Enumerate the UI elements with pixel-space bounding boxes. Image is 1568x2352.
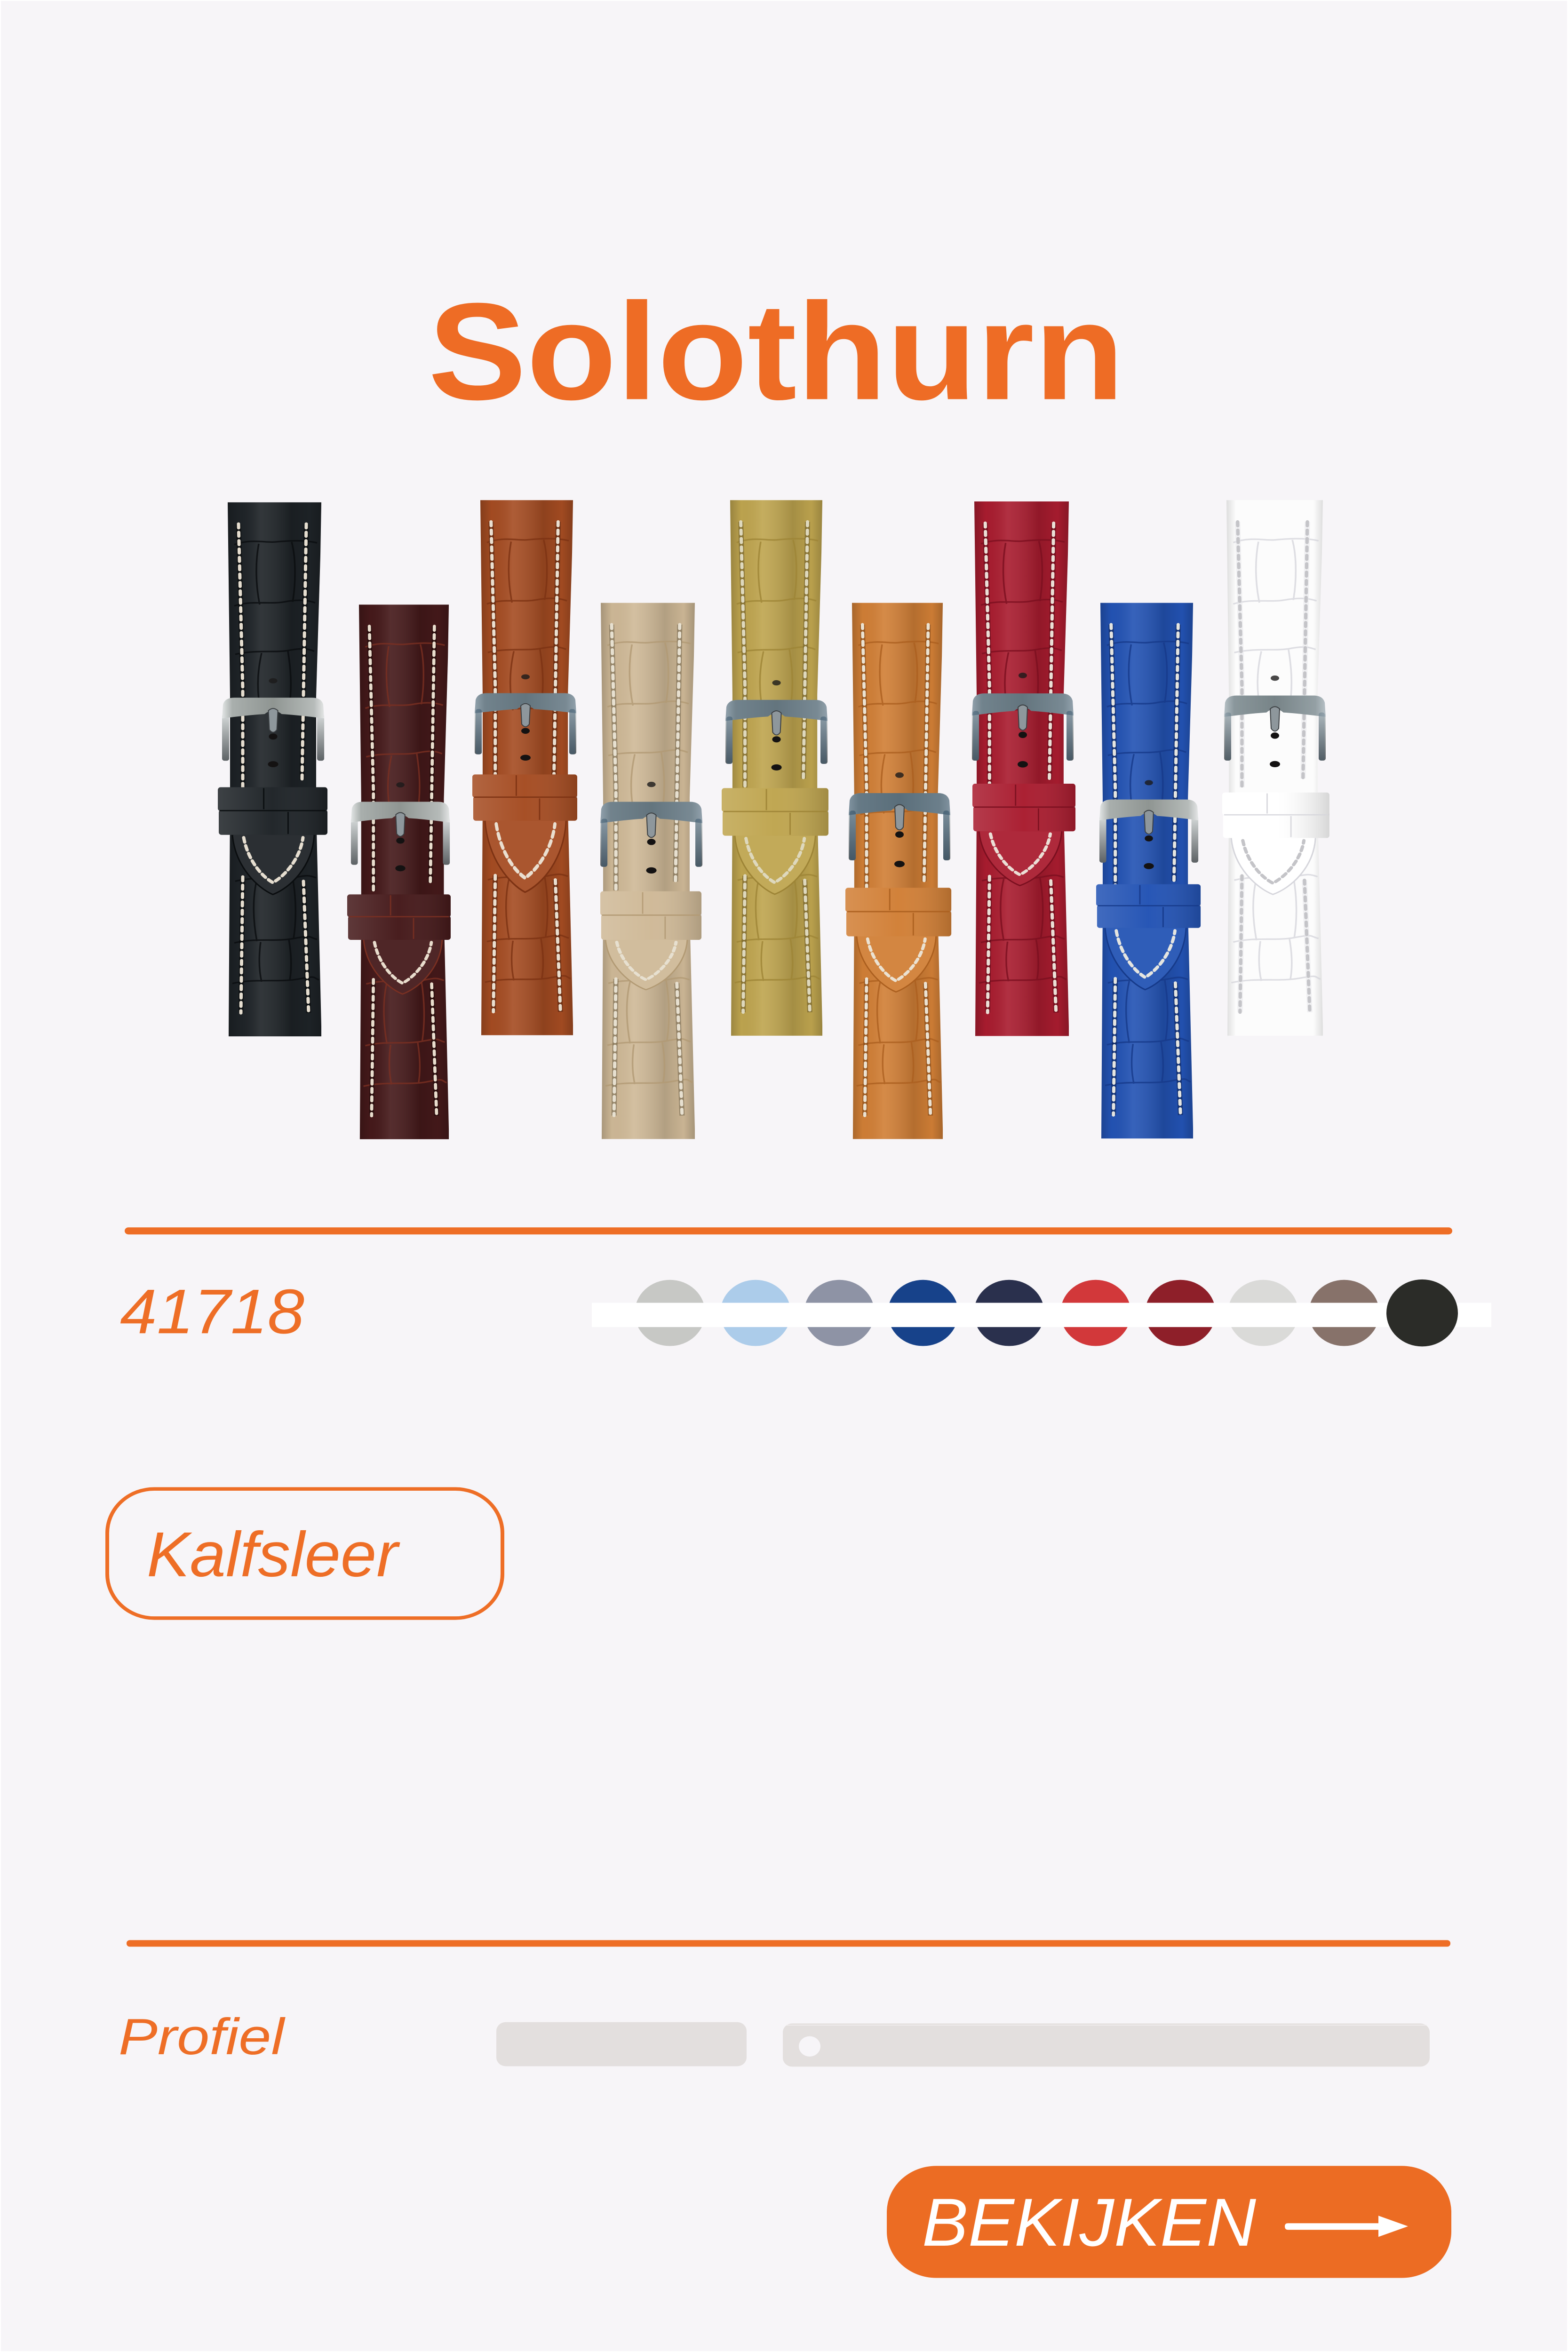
article number: 41718 (120, 1277, 304, 1347)
strap: orange (845, 603, 951, 1139)
colour swatches (592, 1279, 1491, 1346)
strap: dark brown (347, 604, 451, 1139)
button: bekijken (887, 2166, 1451, 2278)
title: Solothurn (428, 274, 1124, 429)
strap: beige (600, 603, 702, 1139)
material tag: Kalfsleer: Kalfsleer (147, 1519, 400, 1590)
button: bekijken: BEKIJKEN (922, 2184, 1256, 2260)
strap: red (972, 501, 1075, 1036)
icon: arrow (1285, 2216, 1408, 2237)
strap: black (218, 502, 327, 1036)
material tag: Kalfsleer (107, 1489, 502, 1618)
strap: cognac (472, 500, 577, 1035)
watch straps group (218, 500, 1329, 1139)
profile shape: short bar (496, 2022, 747, 2066)
strap: blue (1096, 603, 1201, 1138)
profile shape: long bar with hole (783, 2024, 1430, 2066)
profile label: Profiel (119, 2008, 286, 2065)
strap: white (1222, 500, 1329, 1036)
strap: mustard (722, 500, 828, 1036)
